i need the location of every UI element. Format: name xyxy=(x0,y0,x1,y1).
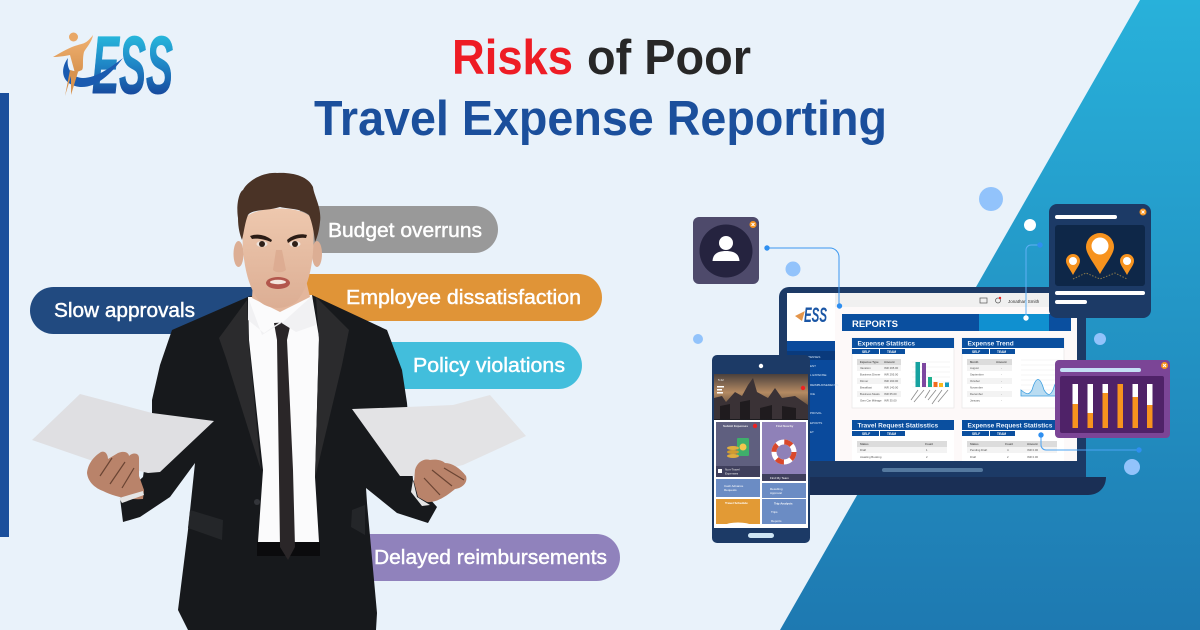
connector: map to laptop xyxy=(1023,242,1043,321)
tile: Submit Expenses xyxy=(716,422,760,477)
card: Expense Trend: SELF xyxy=(972,350,980,354)
trend table: September xyxy=(970,372,984,376)
table: INR 140.00 xyxy=(884,386,899,390)
card: Travel Request Statistics: Travel Request Statisstics xyxy=(858,422,938,430)
trend table: January xyxy=(970,398,981,402)
nose xyxy=(273,250,286,272)
ears xyxy=(234,241,244,267)
tile: Cash Advance Requests: Requests xyxy=(724,488,737,492)
tile: Trip Analysis: Trip Analysis xyxy=(774,502,793,506)
left accent bar xyxy=(0,93,9,537)
right paper xyxy=(352,395,526,476)
phone tile area xyxy=(714,420,808,528)
card: Expense Request Statistics: 2 xyxy=(1007,455,1009,459)
title line 1: Risks xyxy=(452,31,573,85)
collar xyxy=(248,296,316,335)
tile: Trip Analysis: Trips xyxy=(771,510,778,514)
card: Expense Request Statistics: 4 xyxy=(1007,448,1009,452)
table: INR 190.00 xyxy=(884,379,899,383)
pill: Delayed reimbursements: Delayed reimbursements xyxy=(374,546,607,569)
card: Expense Request Statistics: TEAM xyxy=(997,432,1006,436)
laptop lid xyxy=(779,287,1086,477)
panel: map pins xyxy=(1049,204,1151,318)
pill: Policy violations: Policy violations xyxy=(413,354,565,377)
icon: dotted route xyxy=(1073,273,1127,279)
icon: close button xyxy=(750,221,756,228)
card: Travel Request Statistics: Count xyxy=(925,442,933,446)
header bar: Jonathan Smith xyxy=(1008,299,1040,304)
pill: Policy violations xyxy=(380,342,582,389)
phone home button xyxy=(748,533,774,538)
reports banner xyxy=(842,314,1071,331)
tile: Resulting Approval xyxy=(762,483,806,498)
card: Expense Trend xyxy=(962,338,1064,408)
text: ESS xyxy=(92,20,173,111)
lapel right xyxy=(315,297,349,478)
laptop logo xyxy=(795,304,827,327)
trend table: - xyxy=(1001,398,1002,402)
phone city photo xyxy=(714,374,808,420)
tile: Trip Analysis: Reports xyxy=(771,519,782,523)
card: Expense Trend: Expense Trend xyxy=(968,340,1014,348)
card: Expense Statistics: SELF xyxy=(862,350,870,354)
card: Expense Trend: TEAM xyxy=(997,350,1006,354)
card: Expense Request Statistics: Amount xyxy=(1027,442,1038,446)
tile: Resulting Approval: Approval xyxy=(770,491,782,495)
card: Travel Request Statistics: Status xyxy=(860,442,869,446)
header bar xyxy=(835,293,1077,307)
pill: Slow approvals: Slow approvals xyxy=(54,299,195,322)
table: Own Car Mileage xyxy=(860,398,882,402)
tile: Submit Expenses: Expenses xyxy=(725,472,739,476)
laptop xyxy=(779,287,1106,495)
eyebrows xyxy=(250,234,307,243)
table: Business Meals xyxy=(860,392,880,396)
belt xyxy=(257,542,320,556)
laptop base xyxy=(800,477,1106,495)
left hand xyxy=(87,452,144,499)
card: Travel Request Statistics: Draft xyxy=(860,448,866,452)
sidebar: PROVAL xyxy=(810,411,822,415)
table xyxy=(857,359,901,402)
card: Expense Statistics xyxy=(852,338,954,408)
tile: Find Nearby xyxy=(762,422,806,481)
tile: Trip Analysis xyxy=(762,499,806,524)
card: Expense Request Statistics: Draft xyxy=(970,455,976,459)
trend table: - xyxy=(1001,379,1002,383)
icon: right pin xyxy=(1120,254,1134,275)
trend table: November xyxy=(970,386,983,390)
sidebar: L EXPENSE xyxy=(810,373,827,377)
panel: purple bar chart xyxy=(1055,360,1170,438)
trackpad notch xyxy=(882,468,983,472)
left cuff xyxy=(119,491,144,503)
bars xyxy=(1072,384,1152,428)
left paper xyxy=(32,394,214,473)
tile: Find Nearby: Find My Team xyxy=(770,476,789,480)
trend table: October xyxy=(970,379,980,383)
card: Expense Request Statistics: SELF xyxy=(972,432,980,436)
table: Expense Type xyxy=(860,360,879,364)
table: Business Dinner xyxy=(860,372,880,376)
sidebar: ET xyxy=(810,430,814,434)
pill: Delayed reimbursements xyxy=(350,534,620,581)
card: Travel Request Statistics: TEAM xyxy=(887,432,896,436)
connector: chart to laptop xyxy=(1038,432,1142,453)
sidebar: REIMBURSEMENTS xyxy=(810,383,838,387)
card: Expense Request Statistics: Count xyxy=(1005,442,1013,446)
trend table: Amount xyxy=(996,360,1007,364)
card: Travel Request Statistics: 2 xyxy=(926,455,928,459)
title line 2: Travel Expense Reporting xyxy=(314,92,887,146)
pill: Employee dissatisfaction xyxy=(300,274,602,321)
neck xyxy=(252,280,310,312)
tile: Cash Advance Requests: Cash Advance xyxy=(724,484,744,488)
sidebar: ICE xyxy=(810,392,815,396)
icon: close button xyxy=(1161,362,1168,369)
table: INR 35.00 xyxy=(884,398,897,402)
mouth xyxy=(266,277,290,289)
card: Expense Request Statistics: Status xyxy=(970,442,979,446)
trend table: - xyxy=(1001,386,1002,390)
card: Travel Request Statistics: 1 xyxy=(926,448,928,452)
trend table: - xyxy=(1001,366,1002,370)
tile: Resulting Approval: Resulting xyxy=(770,487,783,491)
area chart xyxy=(1021,360,1062,396)
panel: user profile xyxy=(693,217,759,284)
trend table: - xyxy=(1001,392,1002,396)
sidebar xyxy=(787,293,838,461)
tile: Cash Advance Requests xyxy=(716,479,760,497)
pill: Budget overruns xyxy=(300,206,498,253)
dots: decorative circles xyxy=(693,187,1140,475)
lapel left xyxy=(219,300,261,470)
icon: large pin xyxy=(1086,233,1114,274)
table: Vacation xyxy=(860,366,871,370)
pill: Budget overruns: Budget overruns xyxy=(328,219,482,242)
laptop logo: ESS xyxy=(804,304,827,327)
card: Travel Request Statistics xyxy=(852,420,954,461)
trend table: August xyxy=(970,366,979,370)
face xyxy=(243,208,314,308)
jacket xyxy=(120,295,437,630)
card: Expense Request Statistics: Expense Request Statistics xyxy=(968,422,1053,430)
eyes xyxy=(256,241,268,247)
title xyxy=(314,31,887,146)
icon: left pin xyxy=(1066,254,1080,275)
table: Breakfast xyxy=(860,386,872,390)
reports banner: REPORTS xyxy=(852,319,898,330)
person holding papers xyxy=(32,173,526,630)
phone xyxy=(712,355,810,543)
icon: user xyxy=(712,236,740,261)
pockets xyxy=(188,510,223,540)
sidebar: EPORTS xyxy=(810,421,822,425)
table: INR 295.00 xyxy=(884,366,899,370)
card: Travel Request Statistics: SELF xyxy=(862,432,870,436)
table: Dinner xyxy=(860,379,868,383)
sidebar: TRAVEL EXPENSES xyxy=(792,355,820,359)
icon: close button xyxy=(1140,208,1146,216)
card: Expense Request Statistics: Pending Draft xyxy=(970,448,987,452)
connector: user to laptop xyxy=(764,245,842,309)
phone city photo: 5:42 xyxy=(718,378,724,382)
trend table: Month xyxy=(970,360,979,364)
card: Expense Request Statistics: INR 0.00 xyxy=(1027,448,1038,452)
tile: Submit Expenses: Submit Expenses xyxy=(723,424,748,428)
tile: Travel Schedule: Travel Schedule xyxy=(725,501,748,505)
tile: Find Nearby: Find Nearby xyxy=(776,424,794,428)
logo: ESS xyxy=(53,20,173,111)
card: Expense Statistics: TEAM xyxy=(887,350,896,354)
title line 1 xyxy=(452,31,751,85)
tile: Submit Expenses: Non-Travel xyxy=(725,468,740,472)
title line 1: of Poor xyxy=(587,31,751,85)
trend table xyxy=(967,359,1012,402)
tie xyxy=(274,322,295,560)
pill: Slow approvals xyxy=(30,287,260,334)
hair xyxy=(237,173,320,242)
trend table: - xyxy=(1001,372,1002,376)
card: Expense Statistics: Expense Statistics xyxy=(858,340,915,348)
pill: Employee dissatisfaction: Employee dissatisfaction xyxy=(346,286,581,309)
icon: lifebuoy xyxy=(774,442,794,462)
card: Travel Request Statistics: Awaiting Booking xyxy=(860,455,882,459)
tile: Travel Schedule xyxy=(716,499,760,528)
screen xyxy=(787,293,1077,461)
right cuff xyxy=(411,480,430,506)
bar chart xyxy=(911,362,950,404)
table: INR 65.00 xyxy=(884,392,897,396)
table: Amount xyxy=(884,360,895,364)
table: INR 295.00 xyxy=(884,372,899,376)
card: Expense Request Statistics: INR 0.00 xyxy=(1027,455,1038,459)
sidebar: ENT xyxy=(810,364,816,368)
right hand xyxy=(414,459,466,502)
button xyxy=(254,499,260,505)
shirt xyxy=(248,295,319,542)
card: Expense Request Statistics xyxy=(962,420,1064,461)
blue diagonal background panel xyxy=(780,0,1200,630)
trend table: December xyxy=(970,392,983,396)
